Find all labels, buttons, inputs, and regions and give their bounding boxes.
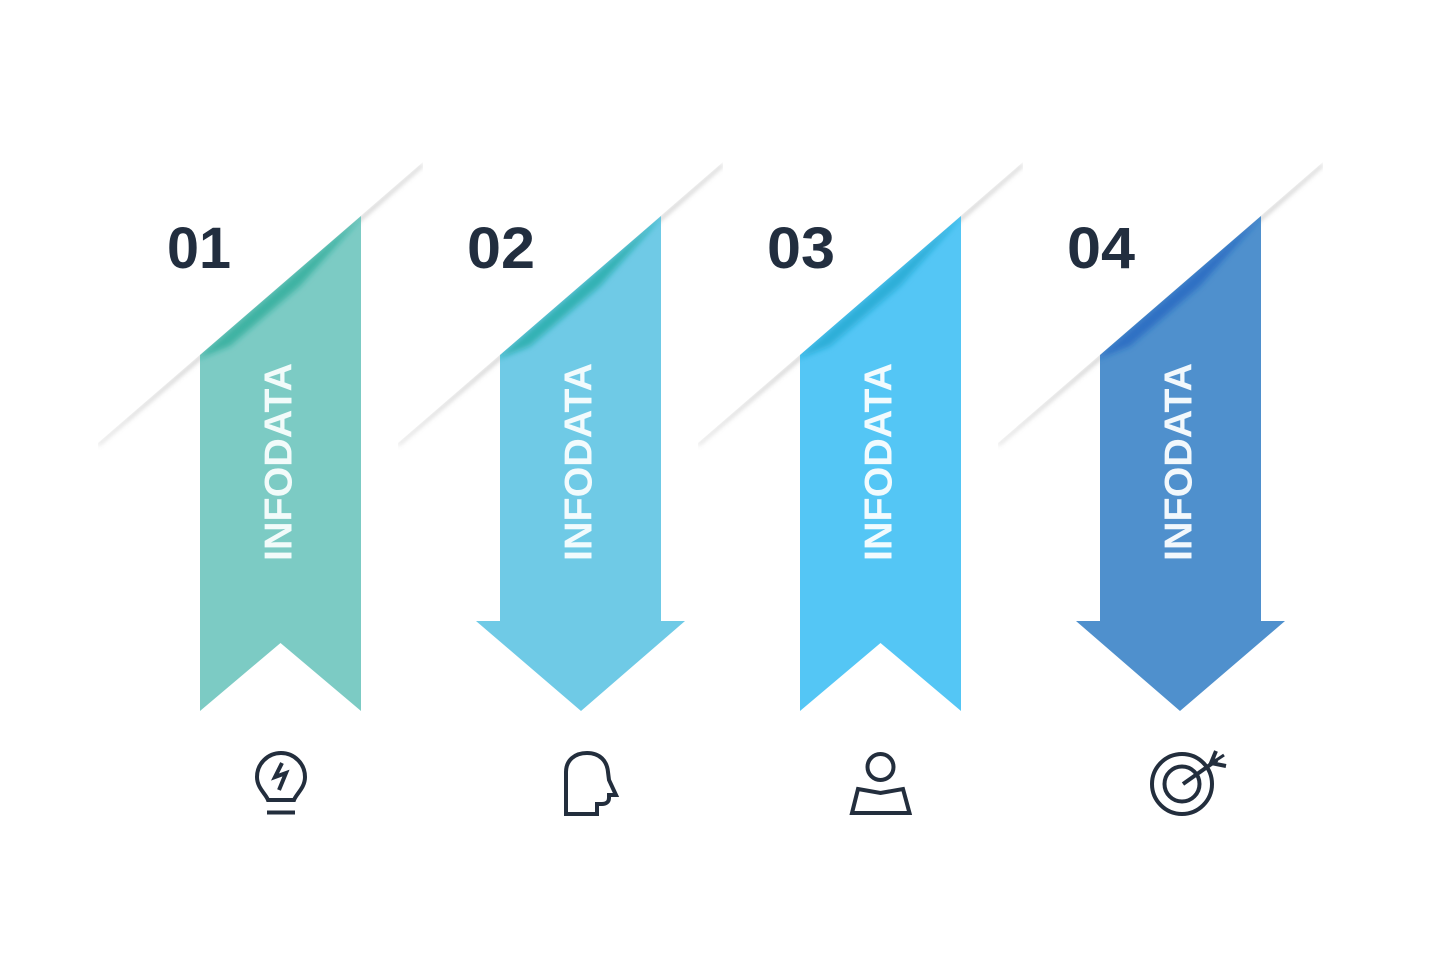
number 03: 03 [767,216,835,281]
label 01: INFODATA [258,363,300,561]
panel: step 02 [398,163,723,814]
icon: light bulb [257,753,305,812]
ribbon 04 [1076,216,1285,711]
fold shadow 03 [698,163,1023,446]
number 04: 04 [1067,216,1135,281]
ribbon 01 [200,216,361,711]
icon: head profile [566,753,616,814]
ribbon 02 [476,216,685,711]
fold shadow 01 [98,163,423,446]
ribbon crease shade 01 [195,212,366,360]
ribbon crease shade 04 [1100,218,1260,360]
label 03: INFODATA [858,363,900,561]
number 01: 01 [167,216,231,281]
panel: step 03 [698,163,1023,813]
ribbon crease shade 03 [800,218,960,360]
fold shadow 04 [998,163,1323,446]
icon: person with map [852,754,910,813]
icon: target with arrow [1152,751,1226,814]
ribbon 03 [800,216,961,711]
label 02: INFODATA [558,363,600,561]
ribbon crease shade 02 [495,212,666,360]
number 02: 02 [467,216,535,281]
label 04: INFODATA [1158,363,1200,561]
panel: step 01 [98,163,423,812]
panel: step 04 [998,163,1323,814]
fold shadow 02 [398,163,723,446]
